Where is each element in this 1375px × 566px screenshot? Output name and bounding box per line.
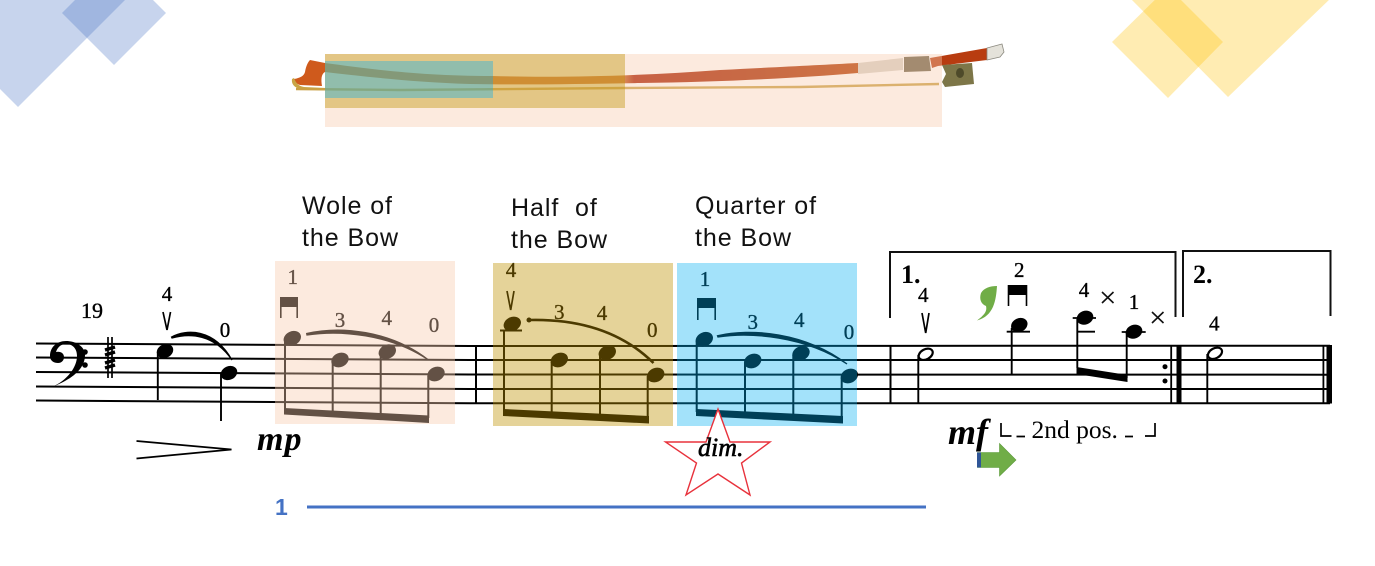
opening notes: 0 [220,318,230,342]
bow mortise [942,63,974,87]
dynamic dim.: dim. [698,433,744,462]
first ending notes: 2 [1014,258,1025,282]
beamed notes: quarter bow: 0 [844,320,854,344]
first ending notes: 4 [918,283,929,307]
beamed notes: half bow: 3 [554,300,565,324]
blue footer line [307,506,926,508]
beamed notes: half bow: 4 [506,258,517,282]
position marking [1001,415,1155,444]
beamed notes: half bow: 0 [647,318,658,342]
violin bow illustration [292,44,1004,90]
bass clef [50,341,88,387]
green arrow [977,444,1016,476]
beamed notes: quarter bow [693,267,860,424]
bow length overlays [325,54,942,127]
decrescendo hairpin [136,441,232,458]
bow head [930,48,987,68]
slide number: 1 [275,494,288,520]
beamed notes: whole bow: 1 [287,265,298,289]
opening notes: 4 [162,282,173,306]
bow stick [325,63,858,84]
bow tip [987,44,1004,60]
highlight box: whole of the bow [275,261,455,424]
label: whole of the bow: the Bow [302,224,399,252]
yellow corner diamonds [1112,0,1331,98]
repeat barline [1162,346,1182,404]
label: half of the bow: Half of [511,194,598,222]
measure number: 19 [81,298,103,323]
label: whole of the bow: Wole of [302,192,393,220]
beamed notes: whole bow: 4 [381,306,392,330]
label: quarter of the bow: the Bow [695,224,792,252]
dynamic mp: mp [257,421,302,458]
beamed notes: quarter bow: 3 [747,310,758,334]
second ending note [1206,312,1224,403]
red star callout [666,409,770,495]
beamed notes: whole bow: 0 [429,313,439,337]
bow grip [904,56,931,72]
first ending notes [917,258,1164,403]
label: quarter of the bow: Quarter of [695,192,817,220]
beamed notes: half bow: 4 [597,301,608,325]
second ending bracket: 2. [1193,260,1212,289]
label: half of the bow: the Bow [511,226,608,254]
beamed notes: whole bow: 3 [335,308,345,332]
opening notes [154,282,240,421]
first ending bracket [890,252,1176,318]
bow winding [858,58,903,74]
music staff [36,344,1330,403]
first ending notes: 4 [1079,278,1090,302]
highlight box: half of the bow [493,263,673,426]
beamed notes: quarter bow: 4 [794,308,805,332]
first ending notes: 1 [1129,290,1139,314]
green breath mark [977,286,997,320]
blue corner diamonds [0,0,166,107]
key signature sharps [105,337,115,378]
bow frog [294,60,325,86]
position marking: 2nd pos. [1032,415,1118,444]
bow hair [296,84,939,90]
dynamic mf: mf [948,412,991,452]
second ending note: 4 [1209,312,1220,336]
first ending bracket: 1. [901,260,920,289]
beamed notes: half bow [500,258,667,424]
beamed notes: whole bow [280,265,447,423]
highlight box: quarter of the bow [677,263,857,426]
beamed notes: quarter bow: 1 [700,267,710,291]
final barline [1322,345,1332,404]
second ending bracket [1183,251,1330,317]
